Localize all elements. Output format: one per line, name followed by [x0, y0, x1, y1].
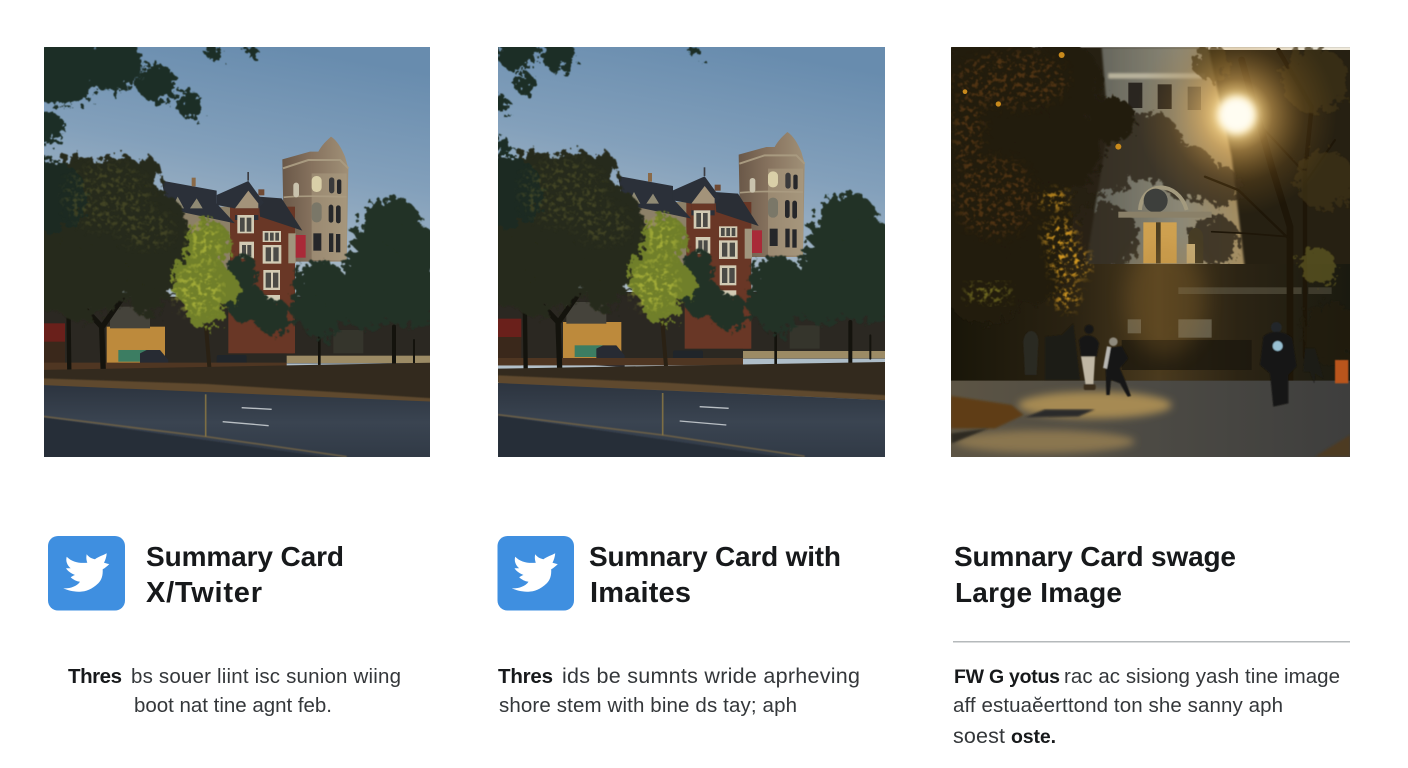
park path — [951, 381, 1350, 457]
town scene — [498, 132, 885, 368]
panel: summary card large image — [953, 541, 1350, 748]
tree veil over building — [1085, 110, 1242, 264]
heading: Summary Card with Images — [589, 541, 841, 609]
image: summary card with images photo of brick building — [498, 47, 885, 457]
heading: Summary Card X/Twitter: X/Twiter — [146, 577, 262, 609]
overhanging foliage — [44, 47, 260, 150]
right bare tree — [1205, 50, 1335, 380]
text block: description three: aff estuaĕerttond ton she sanny aph — [953, 694, 1283, 717]
panel: summary card X/Twitter — [48, 536, 401, 717]
heading: Summary Card with Images: Imaites — [590, 577, 691, 609]
road — [40, 385, 433, 460]
overhanging foliage — [493, 30, 700, 154]
icon: Twitter bird tile — [48, 536, 125, 610]
heading: Summary Card Large Image — [954, 541, 1236, 608]
text block: description two: shore stem with bine ds tay; aph — [499, 694, 797, 717]
lower wall — [951, 264, 1350, 381]
image: summary card large image autumn park at sunset — [951, 47, 1350, 457]
text block: description three — [953, 665, 1340, 748]
text block: description one: Thres — [68, 665, 122, 688]
sun glow — [1150, 47, 1326, 204]
lit windows — [1143, 222, 1177, 263]
text block: description one — [68, 665, 401, 717]
grass verge — [44, 362, 430, 399]
text block: description one: boot nat tine agnt feb. — [134, 694, 332, 717]
grass verge — [498, 362, 888, 400]
left autumn tree — [951, 47, 1140, 316]
heading: Summary Card X/Twitter: Summary Card — [146, 541, 344, 572]
text block: description two — [498, 664, 860, 717]
text block: description three: soest — [953, 724, 1005, 748]
text block: description two: ids be sumnts wride aprheving — [562, 664, 860, 688]
heading: Summary Card Large Image: Large Image — [955, 577, 1122, 608]
heading: Summary Card X/Twitter — [146, 541, 344, 609]
text block: description three: rac ac sisiong yash tine image — [1064, 665, 1340, 688]
icon: Twitter bird tile — [498, 536, 574, 610]
text block: description three: oste. — [1011, 726, 1056, 748]
panel: summary card with images — [498, 536, 860, 717]
road — [498, 383, 888, 460]
pale building — [1085, 47, 1245, 270]
text block: description two: Thres — [498, 665, 553, 688]
text block: description one: bs souer liint isc sunion wiing — [131, 665, 401, 688]
text block: description three: FW G yotus — [954, 666, 1060, 688]
image: summary card photo of brick building — [44, 47, 430, 457]
heading: Summary Card with Images: Sumnary Card with — [589, 541, 841, 572]
people — [1023, 322, 1348, 407]
town scene — [44, 136, 430, 370]
heading: Summary Card Large Image: Sumnary Card swage — [954, 541, 1236, 572]
